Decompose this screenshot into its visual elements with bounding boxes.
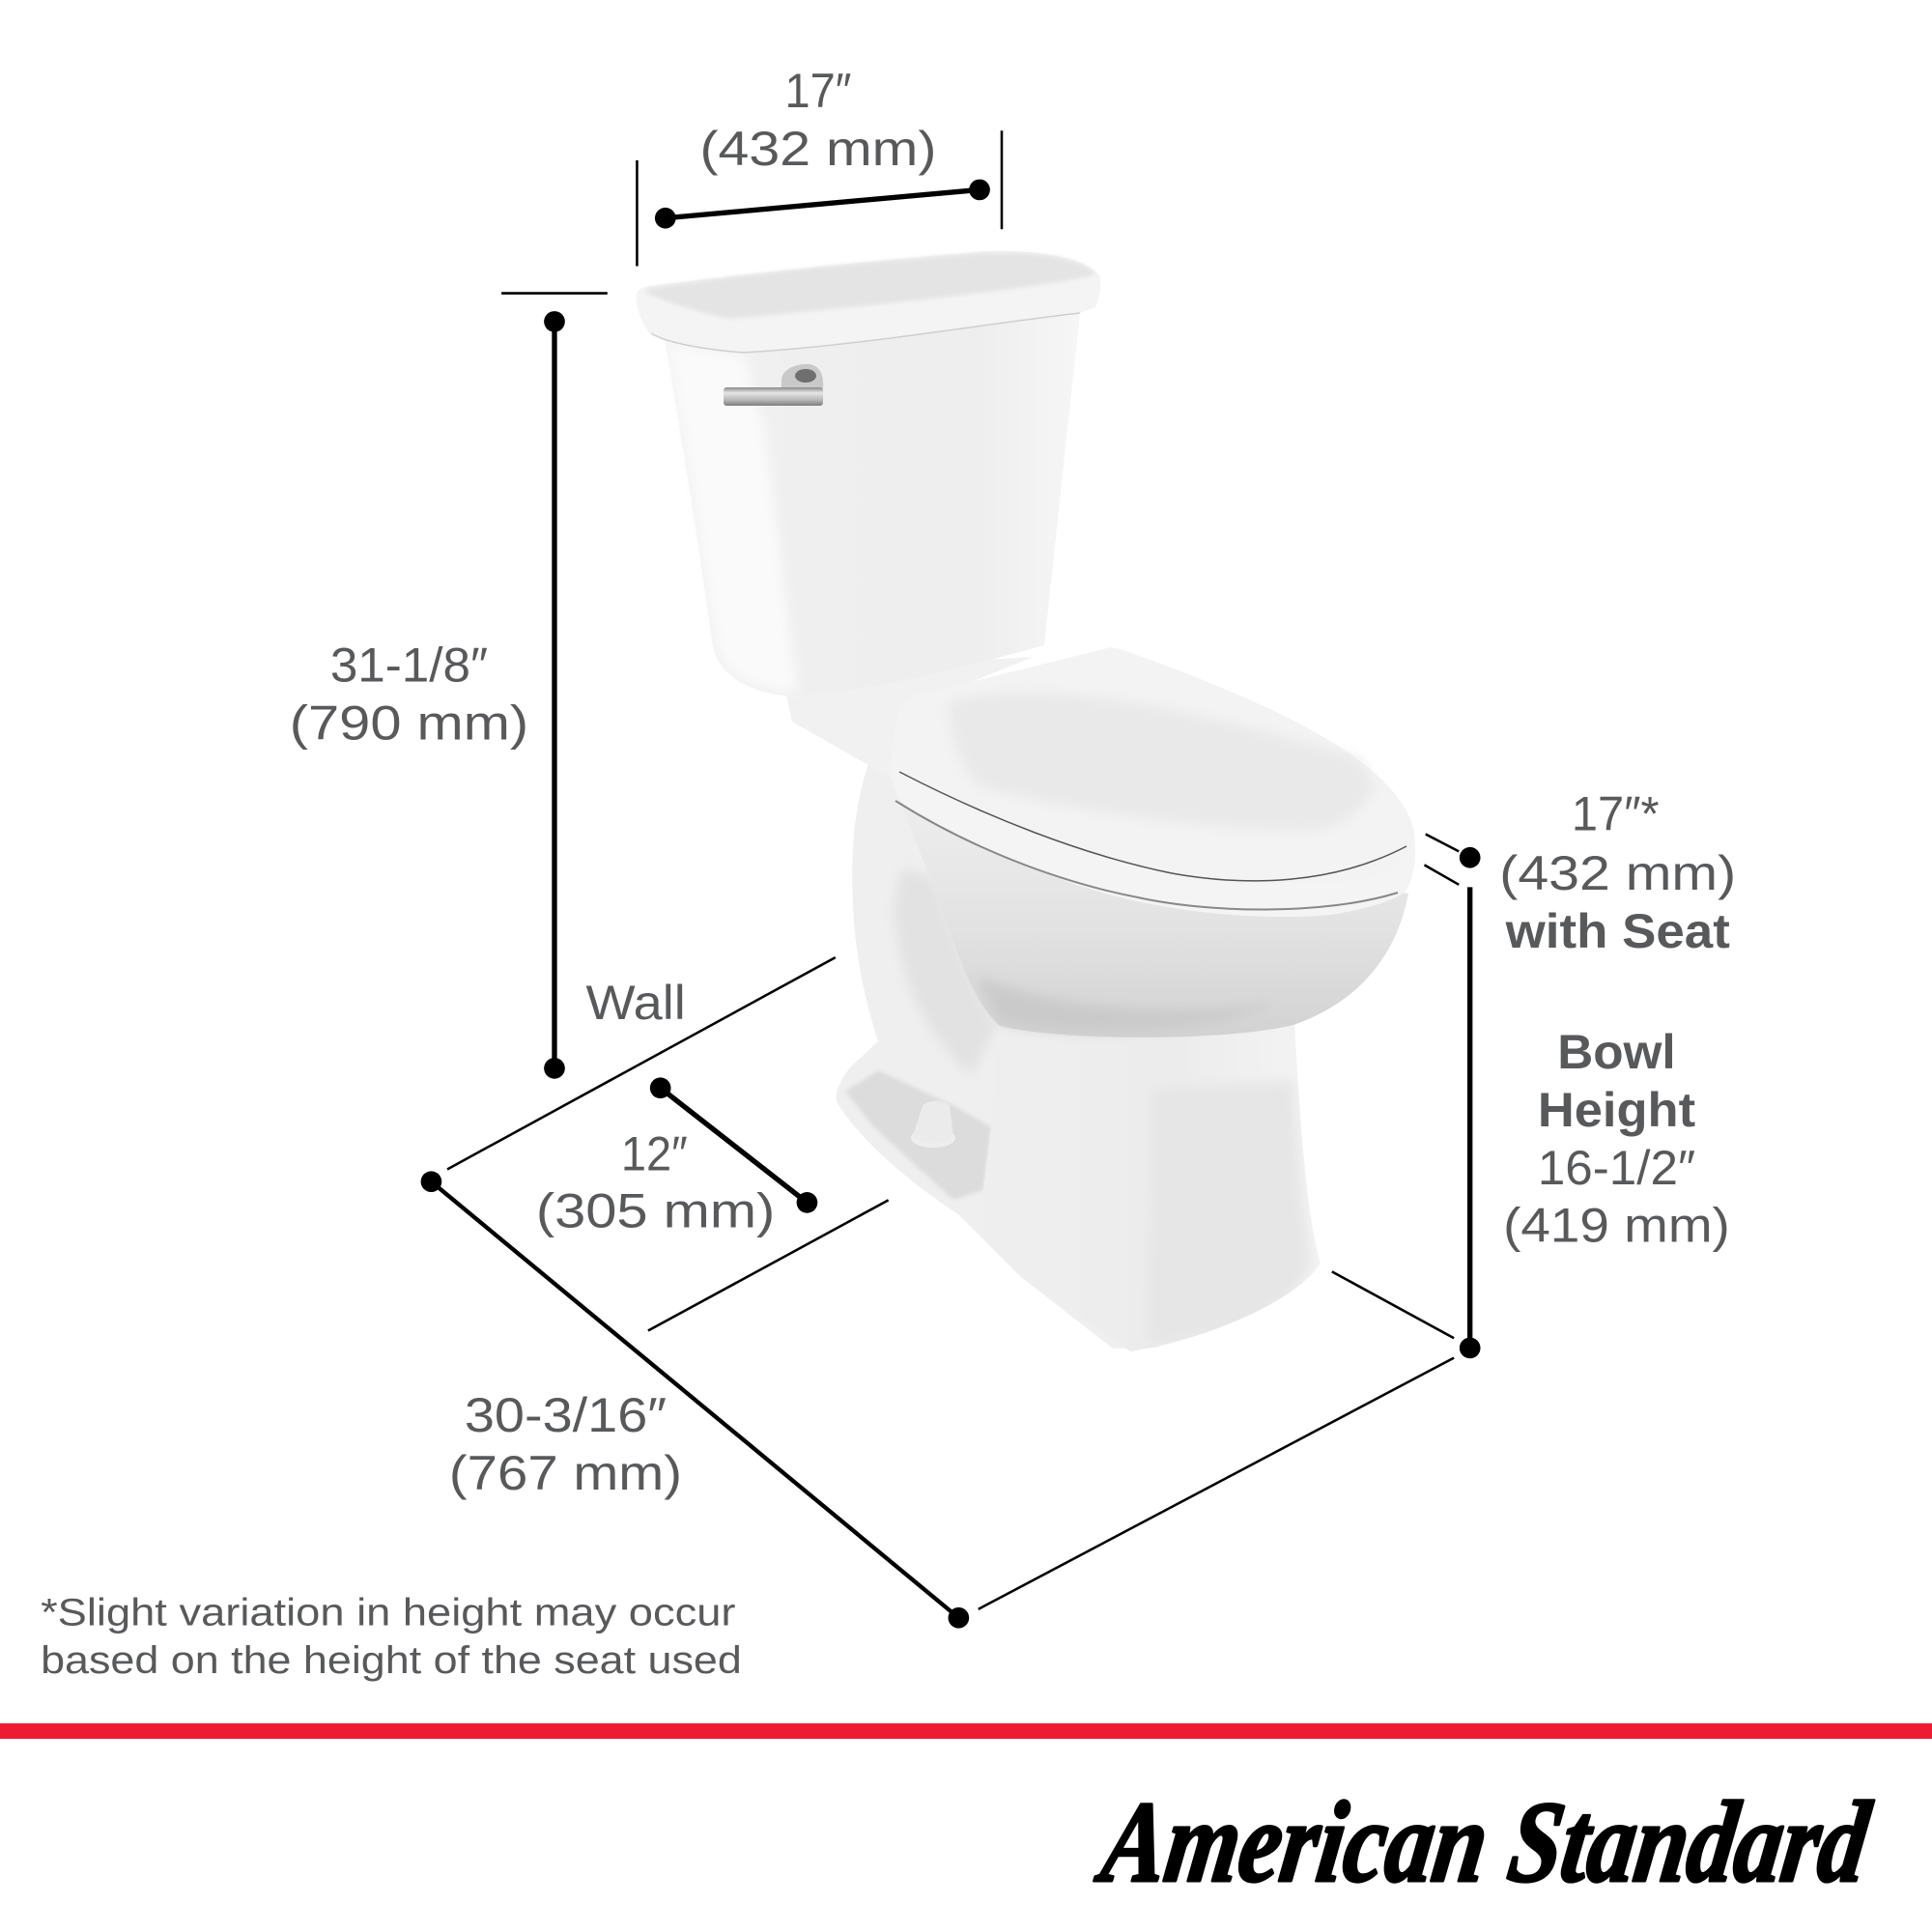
tank connector xyxy=(785,657,1034,784)
dimension: overall height: 31-1/8″ xyxy=(330,638,488,692)
toilet illustration xyxy=(636,251,1415,1351)
dimension: bowl height xyxy=(1424,787,1736,1358)
floor guide lines xyxy=(979,1271,1454,1609)
tank body xyxy=(665,313,1080,696)
dimension lines and labels xyxy=(41,64,1736,1682)
dimension: rough-in: 12″ xyxy=(621,1127,688,1181)
label: wall: Wall xyxy=(586,976,686,1030)
footnote: based on the height of the seat used xyxy=(41,1639,742,1682)
dimension: overall height: (790 mm) xyxy=(290,696,528,750)
dimension: bowl height: (419 mm) xyxy=(1503,1199,1730,1253)
toilet bowl xyxy=(898,797,1408,1037)
dimension: overall depth xyxy=(421,1171,969,1629)
toilet base: back column and foot xyxy=(837,761,1159,1349)
dimension: overall depth: (767 mm) xyxy=(449,1446,682,1500)
seat ring xyxy=(892,744,1415,917)
dimension: tank width: 17″ xyxy=(784,64,851,118)
seat lid xyxy=(893,647,1414,884)
footnote xyxy=(41,1591,742,1682)
red divider bar xyxy=(0,1723,1932,1739)
dimension: overall height xyxy=(290,294,608,1079)
dimension: tank width xyxy=(637,64,1002,267)
toilet pedestal xyxy=(958,1005,1321,1351)
dimension: bowl height: with Seat xyxy=(1505,904,1730,958)
dimension: bowl height: 16-1/2″ xyxy=(1538,1141,1695,1195)
wall line xyxy=(447,957,836,1169)
dimension: tank width: (432 mm) xyxy=(699,122,936,176)
dimension: bowl height: (432 mm) xyxy=(1499,846,1736,900)
dimension: bowl height: Height xyxy=(1538,1083,1695,1137)
dimension: rough-in: (305 mm) xyxy=(536,1183,775,1237)
seat gap lines xyxy=(899,772,1406,881)
dimension: bowl height: 17″* xyxy=(1572,787,1659,841)
flush handle xyxy=(724,364,823,406)
drain line xyxy=(648,1200,889,1331)
tank lid xyxy=(636,251,1100,353)
dimension: bowl height: Bowl xyxy=(1557,1025,1676,1079)
dimension: overall depth: 30-3/16″ xyxy=(465,1388,667,1442)
pedestal facet xyxy=(1211,1084,1309,1327)
bolt cap xyxy=(911,1101,955,1148)
footnote: *Slight variation in height may occur xyxy=(41,1591,735,1634)
dimension: rough-in xyxy=(536,1077,817,1237)
